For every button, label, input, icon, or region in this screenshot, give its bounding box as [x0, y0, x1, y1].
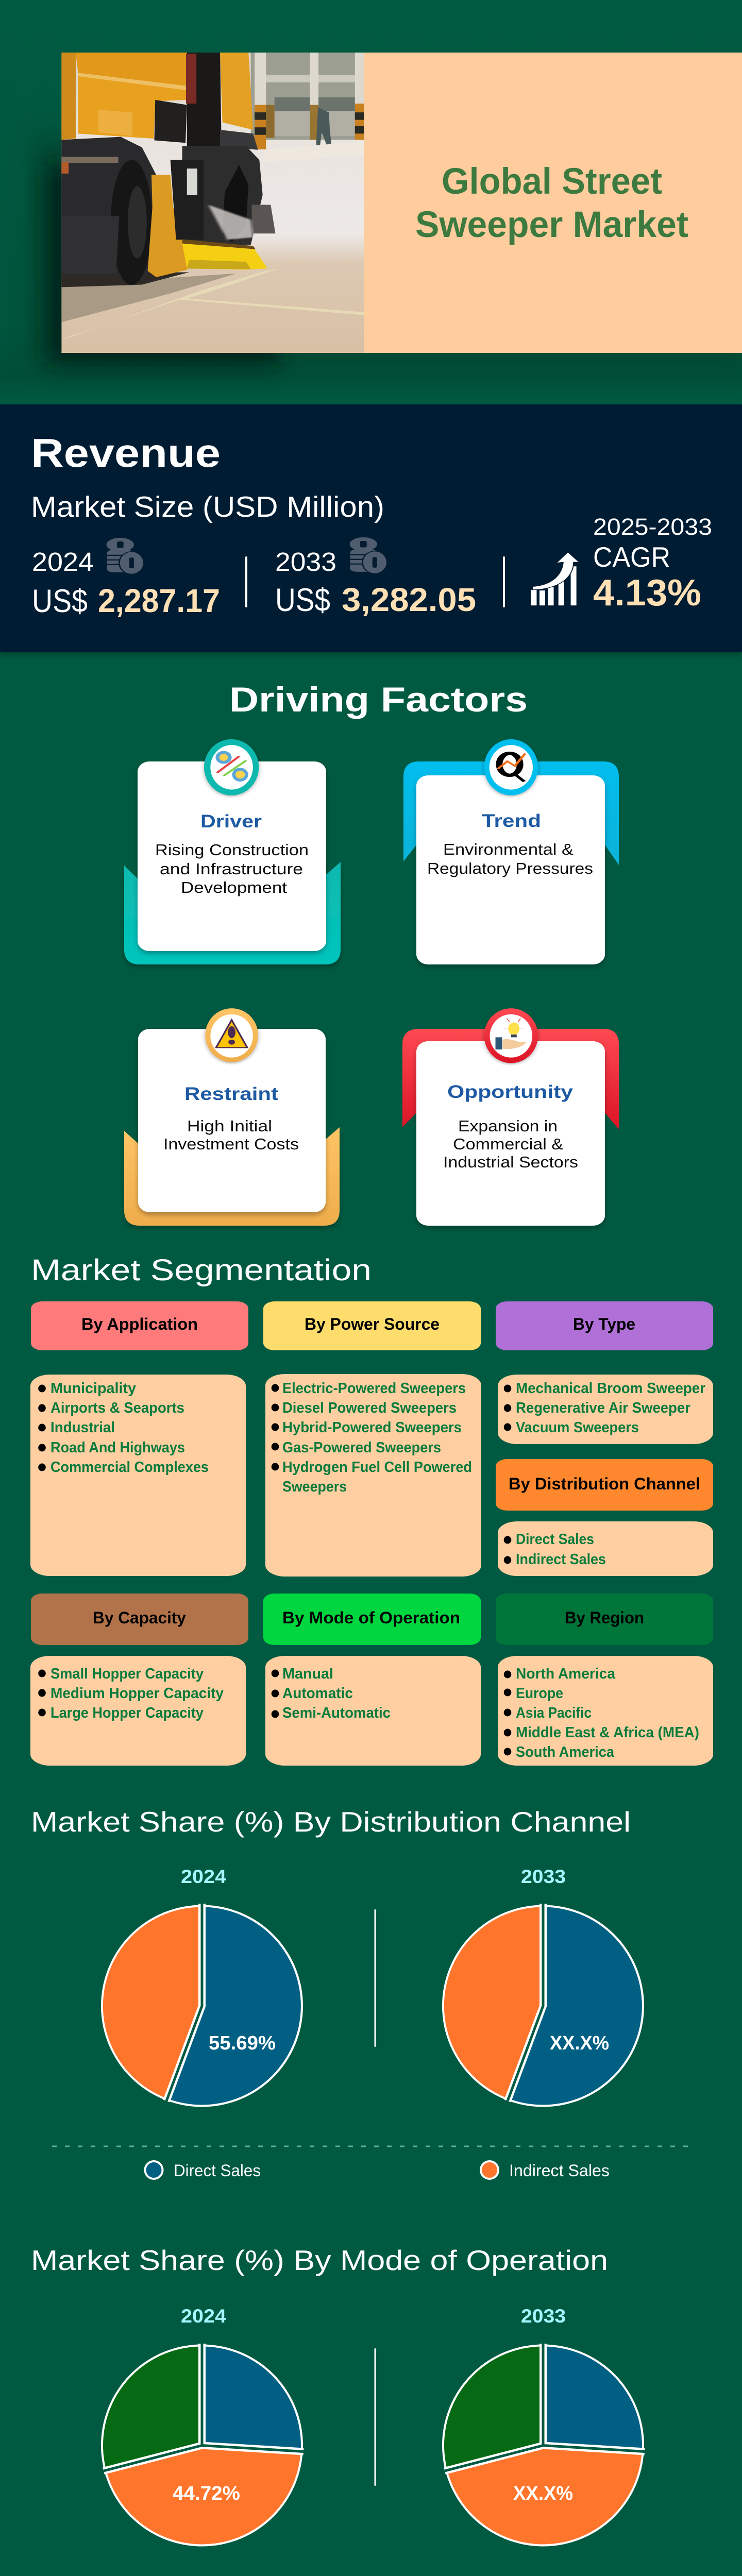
- legend: distribution channel: [145, 2161, 610, 2180]
- chart: mode of operation 2024: 2024: [181, 2306, 226, 2327]
- icon: opportunity: [484, 1008, 538, 1063]
- list: region items: [504, 1666, 699, 1760]
- divider: [245, 556, 247, 607]
- list: type items: [504, 1380, 705, 1436]
- list: type items: Vacuum Sweepers: [516, 1419, 639, 1436]
- card: opportunity: [402, 1008, 619, 1226]
- stat: 2033: 2033: [275, 547, 336, 577]
- text: opportunity description: Industrial Sectors: [443, 1153, 578, 1171]
- text: trend description: Environmental &: [443, 840, 574, 858]
- segment: by application: [30, 1301, 248, 1576]
- list: application items: Municipality: [50, 1380, 136, 1397]
- heading: distribution channel share: Market Share (%) By Distribution Channel: [31, 1806, 631, 1838]
- list: power source items: Gas-Powered Sweepers: [282, 1439, 441, 1456]
- card: restraint: Restraint: [184, 1084, 278, 1104]
- cagr block: 2025-2033: [593, 514, 712, 540]
- cagr block: CAGR: [593, 541, 670, 573]
- card: trend: Trend: [482, 811, 541, 831]
- heading: mode of operation share: Market Share (%) By Mode of Operation: [31, 2244, 608, 2276]
- list: distribution items: Direct Sales: [516, 1531, 594, 1548]
- list: power source items: Hybrid-Powered Sweepers: [282, 1419, 462, 1436]
- segment: by region: [496, 1594, 713, 1766]
- list: power source items: Electric-Powered Sweepers: [282, 1380, 466, 1397]
- text: driver description: Rising Construction: [155, 841, 309, 859]
- cagr block: [593, 514, 712, 614]
- chart: mode of operation 2033: 2033: [521, 2306, 566, 2327]
- stat: 2033: 3,282.05: [342, 581, 476, 618]
- card: opportunity: Opportunity: [447, 1082, 574, 1102]
- text: trend description: [427, 840, 593, 877]
- photo: street sweeper truck: [61, 53, 364, 354]
- list: power source items: [272, 1380, 472, 1495]
- segment: by region: By Region: [565, 1608, 644, 1627]
- list: application items: Airports & Seaports: [50, 1400, 184, 1416]
- chart: mode of operation 2024: [101, 2306, 303, 2546]
- list: application items: Industrial: [50, 1419, 115, 1436]
- chart: distribution channel 2024: [101, 1866, 303, 2107]
- heading: revenue: Revenue: [31, 430, 221, 476]
- list: region items: North America: [516, 1666, 616, 1682]
- list: power source items: Diesel Powered Sweepers: [282, 1400, 457, 1416]
- list: power source items: Hydrogen Fuel Cell Powered: [282, 1459, 472, 1476]
- text: driver description: and Infrastructure: [160, 860, 303, 878]
- icon: trend: [484, 739, 538, 795]
- segment: by distribution channel: [496, 1459, 713, 1576]
- segment: by type: By Type: [573, 1315, 635, 1333]
- chart: distribution channel 2033: [442, 1866, 644, 2107]
- list: application items: Road And Highways: [50, 1439, 185, 1456]
- list: type items: Regenerative Air Sweeper: [516, 1400, 690, 1416]
- chart: distribution channel 2024: 55.69%: [209, 2032, 276, 2054]
- segment: by mode of operation: By Mode of Operation: [282, 1608, 460, 1627]
- icon: growth arrow: [531, 552, 579, 605]
- stat: 2033: US$: [275, 582, 330, 618]
- heading: driving factors: Driving Factors: [229, 680, 528, 719]
- heading: market segmentation: Market Segmentation: [31, 1253, 372, 1287]
- title block: Sweeper Market: [415, 205, 688, 245]
- market size label: Market Size (USD Million): [31, 490, 384, 523]
- list: distribution items: Indirect Sales: [516, 1551, 606, 1568]
- stat: 2033: [275, 547, 476, 618]
- list: power source items: Sweepers: [282, 1479, 347, 1495]
- card: driver: [124, 739, 341, 964]
- chart: mode of operation 2024: 44.72%: [173, 2483, 240, 2504]
- text: restraint description: High Initial: [187, 1117, 272, 1135]
- text: opportunity description: [443, 1117, 578, 1171]
- list: region items: Europe: [516, 1685, 563, 1702]
- panel: hero banner: [31, 53, 742, 366]
- card: restraint: [124, 1008, 340, 1226]
- text: driver description: Development: [181, 878, 287, 896]
- card: trend: [403, 739, 619, 964]
- list: capacity items: [38, 1666, 224, 1721]
- text: restraint description: Investment Costs: [163, 1135, 299, 1153]
- list: region items: Asia Pacific: [516, 1705, 592, 1721]
- panel: revenue: [0, 404, 742, 652]
- stat: 2024: 2024: [32, 547, 94, 577]
- icon: driver: [204, 739, 259, 795]
- list: region items: South America: [516, 1744, 615, 1760]
- segment: by capacity: By Capacity: [93, 1608, 186, 1627]
- segment: by distribution channel: By Distribution Channel: [509, 1475, 700, 1493]
- list: capacity items: Small Hopper Capacity: [50, 1666, 204, 1682]
- stat: 2024: US$: [32, 583, 88, 619]
- chart: mode of operation 2033: [442, 2306, 645, 2546]
- divider: [374, 2348, 376, 2486]
- title block: [364, 53, 742, 353]
- list: mode items: Semi-Automatic: [282, 1705, 391, 1721]
- list: mode items: Automatic: [282, 1685, 353, 1702]
- text: opportunity description: Commercial &: [453, 1135, 563, 1153]
- chart: distribution channel 2024: 2024: [181, 1866, 226, 1887]
- icon: coins 2024: [107, 538, 144, 574]
- segment: by type: [496, 1301, 713, 1444]
- list: application items: Commercial Complexes: [50, 1459, 209, 1476]
- legend: distribution channel: Direct Sales: [174, 2161, 261, 2180]
- list: application items: [38, 1380, 209, 1476]
- list: mode items: Manual: [282, 1666, 333, 1682]
- legend: distribution channel: Indirect Sales: [509, 2161, 610, 2180]
- divider: [374, 1909, 376, 2047]
- title block: Global Street: [442, 161, 662, 202]
- icon: coins 2033: [350, 537, 387, 573]
- chart: mode of operation 2033: XX.X%: [513, 2483, 573, 2504]
- list: region items: Middle East & Africa (MEA): [516, 1724, 699, 1741]
- text: trend description: Regulatory Pressures: [427, 859, 593, 877]
- text: driver description: [155, 841, 309, 896]
- list: distribution items: [504, 1531, 606, 1568]
- icon: restraint: [205, 1008, 258, 1062]
- divider: [503, 556, 505, 607]
- stat: 2024: [32, 547, 220, 619]
- list: mode items: [272, 1666, 391, 1721]
- segment: by capacity: [30, 1594, 248, 1766]
- chart: distribution channel 2033: XX.X%: [550, 2032, 609, 2054]
- list: type items: Mechanical Broom Sweeper: [516, 1380, 705, 1397]
- stat: 2024: 2,287.17: [98, 582, 220, 619]
- segment: by power source: [263, 1301, 481, 1577]
- segment: by power source: By Power Source: [305, 1315, 440, 1333]
- cagr block: 4.13%: [593, 572, 701, 614]
- list: capacity items: Large Hopper Capacity: [50, 1705, 204, 1721]
- text: opportunity description: Expansion in: [458, 1117, 558, 1135]
- chart: distribution channel 2033: 2033: [521, 1866, 566, 1887]
- card: driver: Driver: [200, 811, 262, 832]
- text: restraint description: [163, 1117, 299, 1153]
- segment: by application: By Application: [81, 1315, 198, 1333]
- segment: by mode of operation: [263, 1594, 481, 1766]
- list: capacity items: Medium Hopper Capacity: [50, 1685, 224, 1702]
